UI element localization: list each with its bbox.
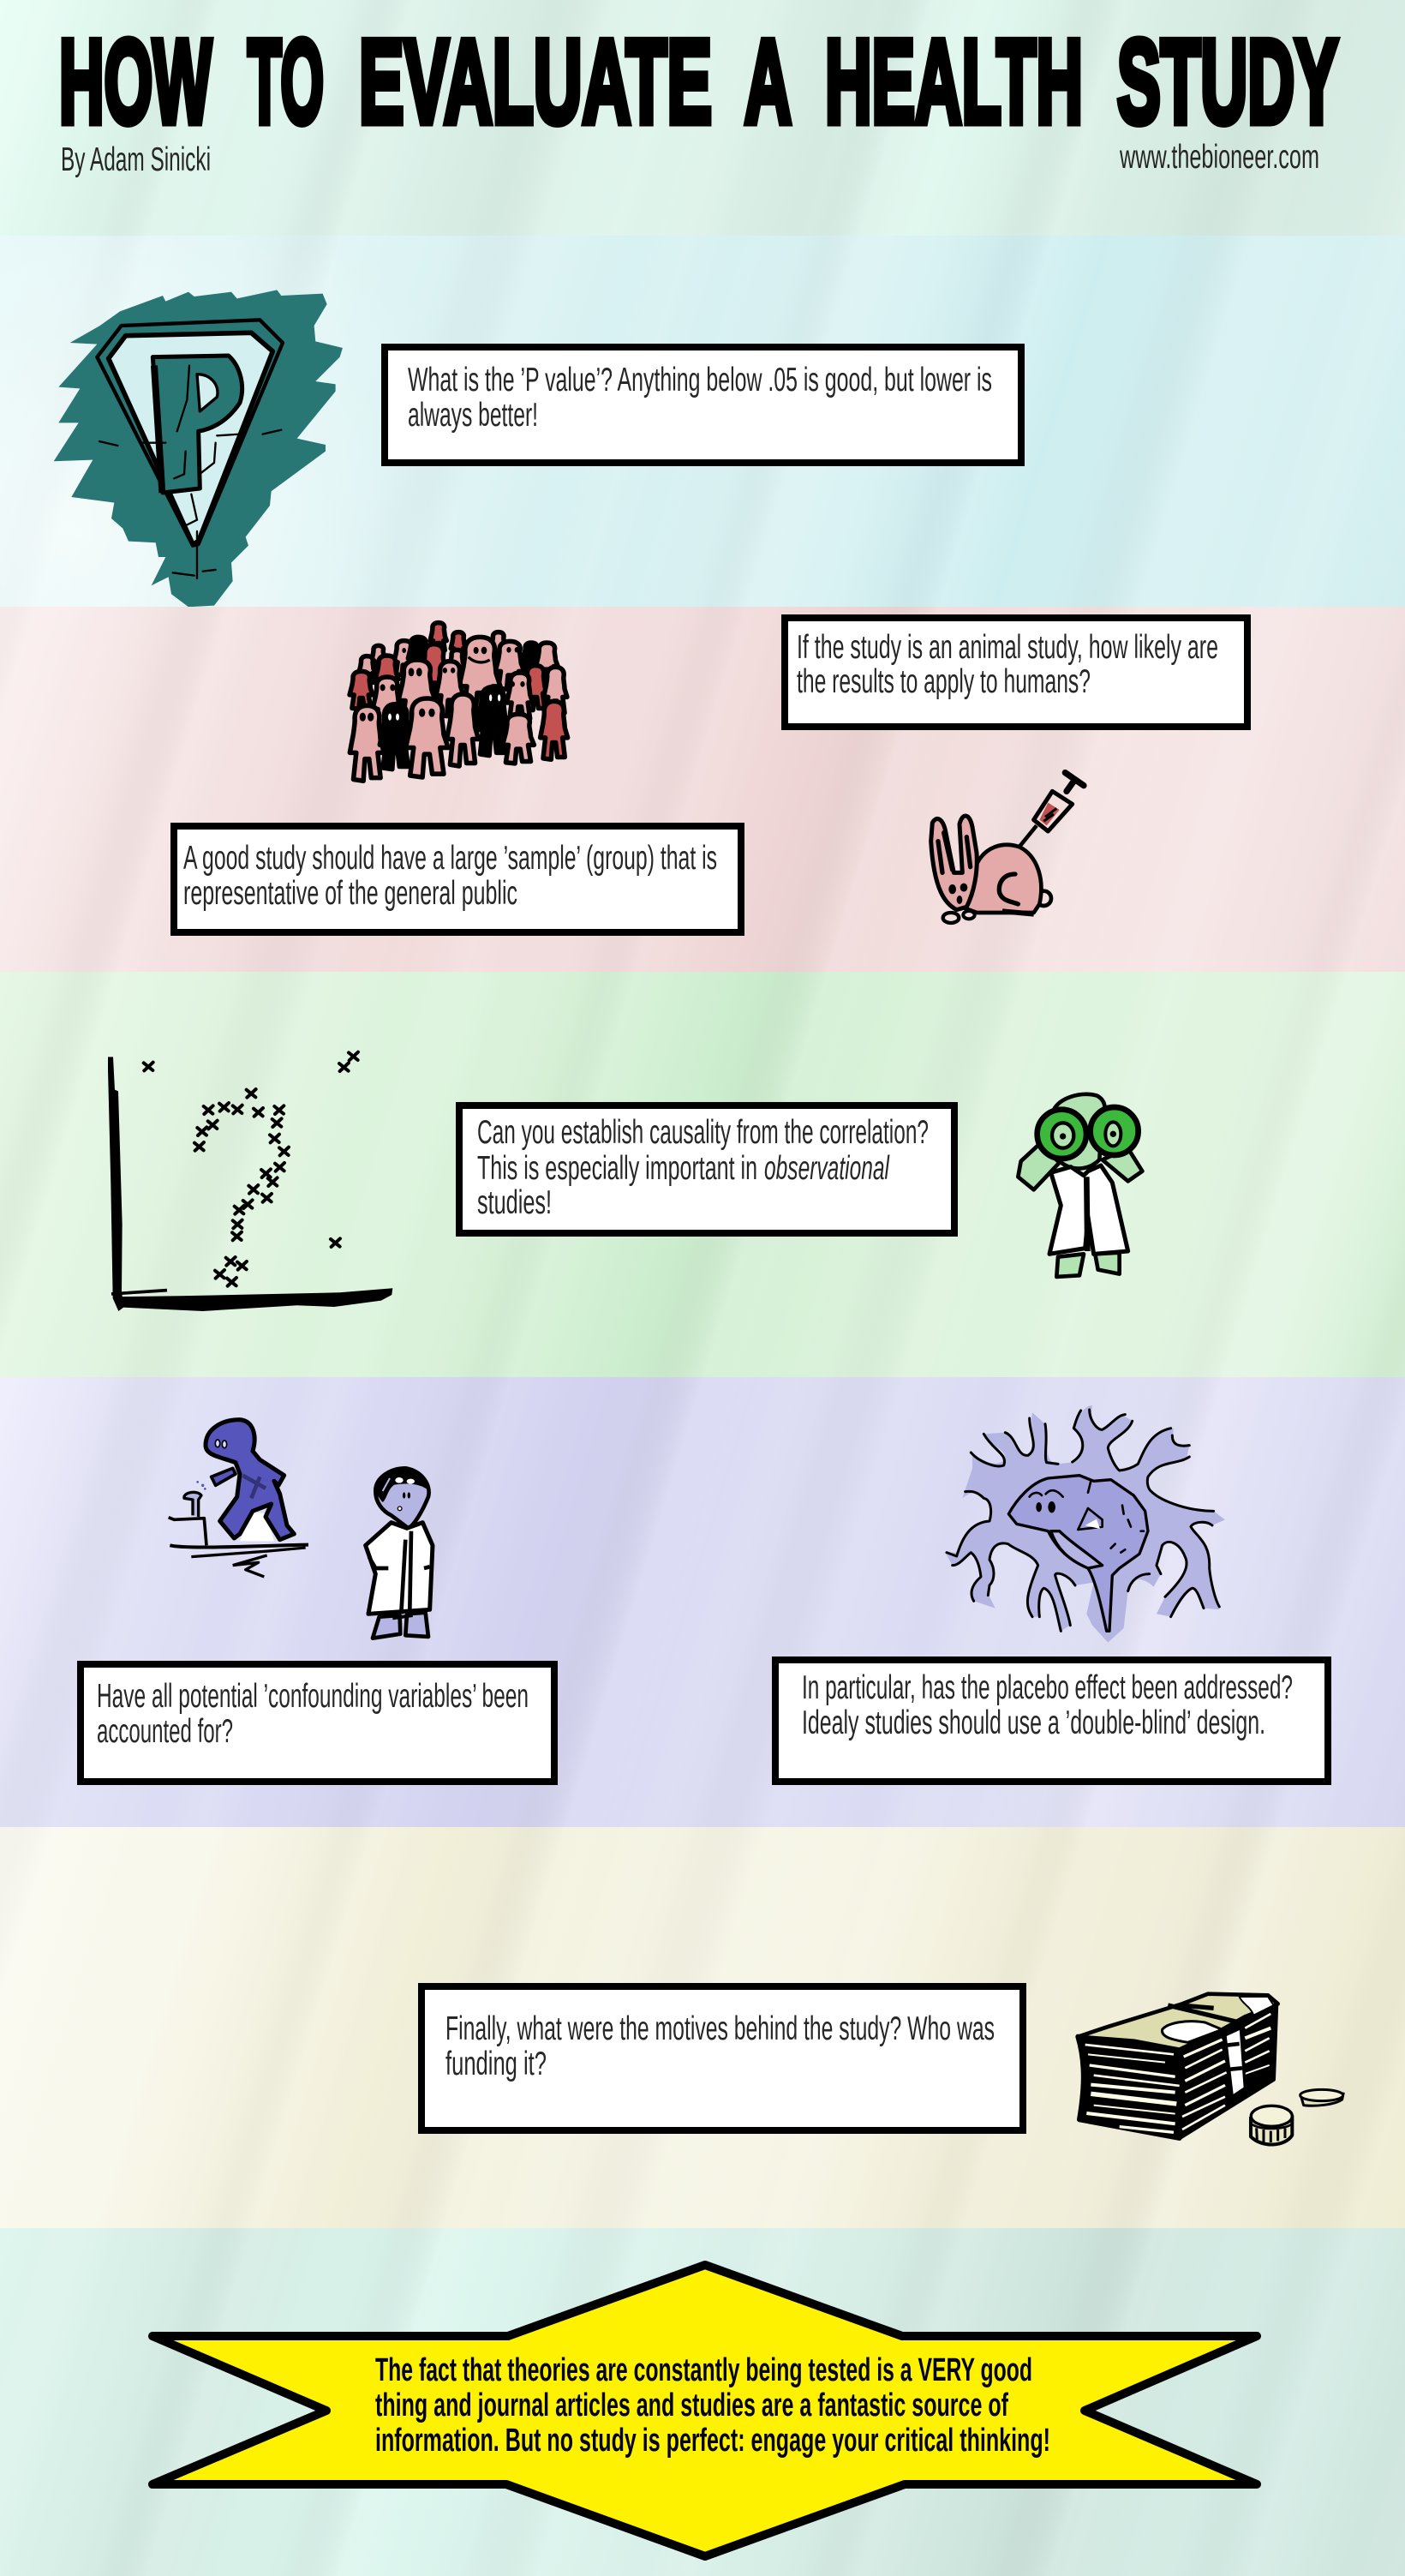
text box: animal study: the results to apply to humans? — [797, 663, 1091, 700]
text box: animal study — [785, 618, 1247, 727]
callout: yellow star banner: thing and journal articles and studies are a fantastic source of — [375, 2387, 1008, 2423]
text box: confounding variables — [81, 1664, 554, 1782]
text box: sample size — [174, 826, 741, 932]
title: HOW — [59, 15, 212, 148]
icon: brain in neuron — [945, 1405, 1225, 1643]
text box: funding — [422, 1986, 1023, 2130]
icon: crowd of people — [350, 623, 568, 781]
panel: confounding variables and placebo — [0, 1377, 1405, 1827]
text box: confounding variables: Have all potential ’confounding variables’ been — [97, 1678, 529, 1715]
text box: placebo effect — [775, 1660, 1328, 1782]
title — [59, 15, 1338, 148]
text box: sample size: A good study should have a large ’sample’ (group) that is — [183, 840, 717, 877]
text box: sample size: representative of the general public — [183, 875, 517, 912]
text box: p value: always better! — [408, 397, 538, 434]
text box: funding: Finally, what were the motives behind the study? Who was — [445, 2010, 995, 2047]
text box: causality: Can you establish causality from the correlation? — [477, 1114, 929, 1151]
text box: confounding variables: accounted for? — [97, 1713, 233, 1750]
panel: sample and animal studies — [0, 607, 1405, 972]
text box: causality: This is especially important in — [477, 1150, 757, 1187]
text box: causality: studies! — [477, 1184, 552, 1221]
icon: scientist with binoculars — [1018, 1094, 1142, 1277]
text box: funding: funding it? — [445, 2046, 547, 2082]
callout: yellow star banner — [152, 2265, 1257, 2556]
panel: funding motives — [0, 1827, 1405, 2228]
callout: yellow star banner: The fact that theories are constantly being tested is a VERY good — [375, 2352, 1032, 2388]
panel: header — [0, 0, 1405, 236]
title: HEALTH — [825, 15, 1083, 148]
icon: figure at lever on platform — [169, 1420, 433, 1638]
callout: yellow star banner: information. But no study is perfect: engage your critical thinking! — [375, 2423, 1050, 2459]
text box: causality — [459, 1105, 954, 1233]
author byline: By Adam Sinicki — [61, 141, 211, 178]
icon: stack of money and coins — [1078, 1994, 1343, 2145]
chart: scatter plot forming a question mark — [108, 1052, 392, 1311]
title: TO — [248, 15, 324, 148]
panel: p value — [0, 236, 1405, 607]
title: EVALUATE — [359, 15, 712, 148]
icon: rabbit with syringe — [931, 773, 1084, 923]
panel: conclusion — [0, 2228, 1405, 2576]
text box: causality: observational — [764, 1150, 890, 1187]
text box: p value: What is the ’P value’? Anything below .05 is good, but lower is — [408, 362, 992, 398]
icon: p value shield — [54, 290, 343, 607]
text box: p value — [385, 347, 1021, 463]
panel: correlation and causality — [0, 972, 1405, 1377]
title: A — [744, 15, 792, 148]
